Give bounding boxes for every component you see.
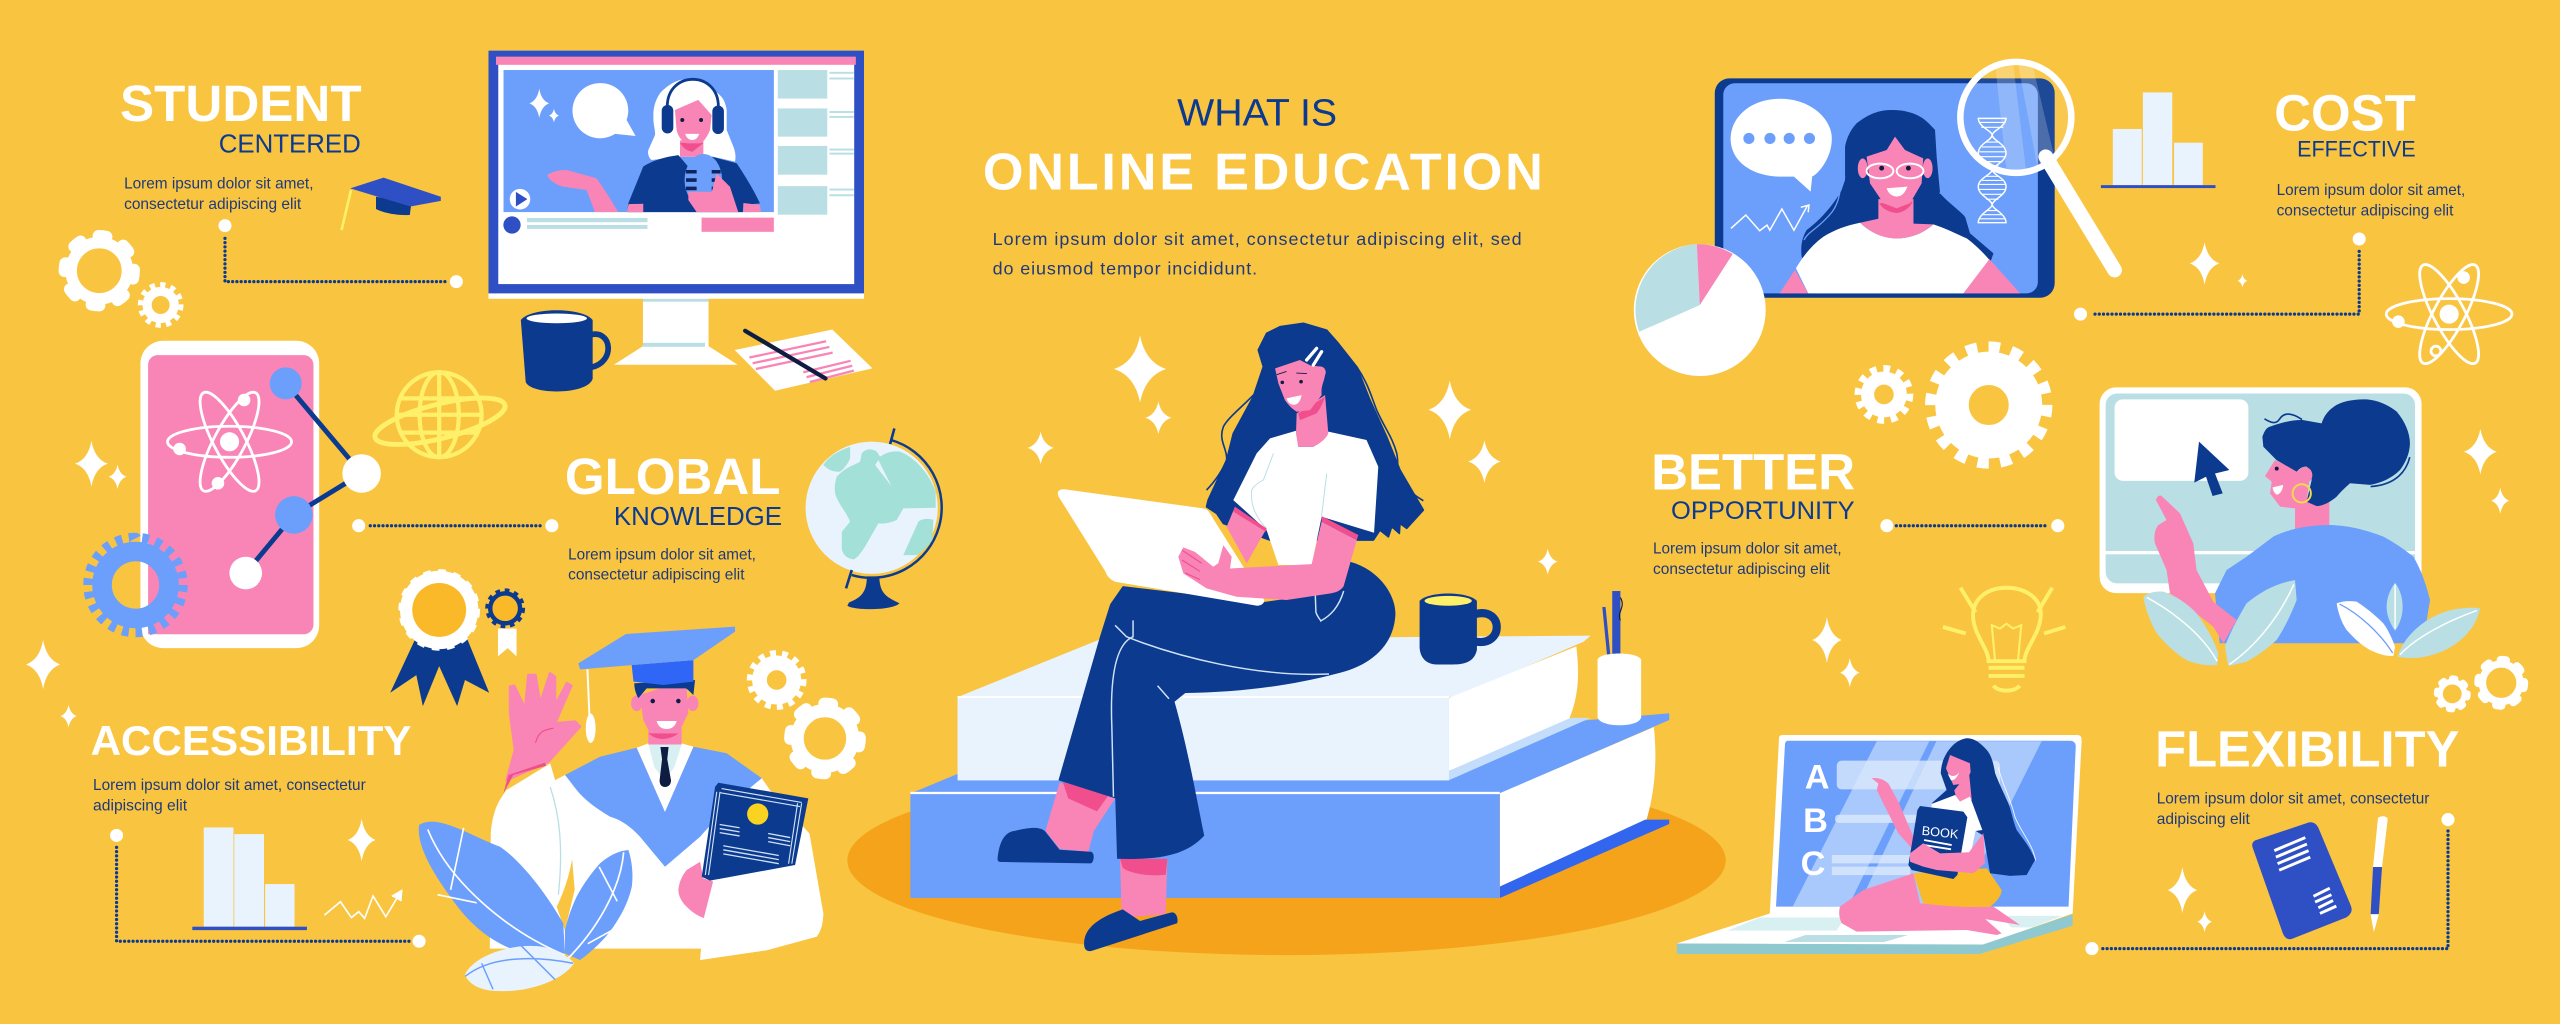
title block: do eiusmod tempor incididunt. <box>993 258 1257 278</box>
pie chart <box>1634 244 1766 376</box>
speech bubble dots <box>1731 99 1832 192</box>
icon: white gear bottom right large <box>2478 660 2524 706</box>
icon: paper and pen <box>735 329 872 391</box>
heading: student centered: CENTERED <box>219 131 361 159</box>
monitor stand <box>614 299 738 365</box>
icon: white atom <box>2386 258 2512 370</box>
pointing arm <box>2154 496 2237 643</box>
face <box>1275 360 1326 412</box>
heading: better opportunity: consectetur adipiscing elit <box>1653 561 1831 578</box>
long hair back <box>1207 323 1423 540</box>
icon: large award rosette <box>390 573 489 706</box>
icon: white gear large left <box>64 236 134 305</box>
blue leaf small <box>565 850 632 960</box>
diploma <box>702 783 808 881</box>
jeans <box>1058 561 1395 859</box>
video area <box>504 70 774 212</box>
sparkles: near notebook <box>2168 867 2212 932</box>
heading: student centered <box>120 75 362 213</box>
heading: better opportunity: OPPORTUNITY <box>1671 497 1855 525</box>
mortarboard <box>632 660 693 685</box>
figure: woman with laptop <box>998 323 1423 951</box>
heading: global knowledge <box>565 448 782 583</box>
heading: better opportunity <box>1651 442 1855 578</box>
book label: BOOK <box>1921 823 1960 842</box>
far arm <box>1227 507 1267 563</box>
sparkles: near cost connector <box>2190 242 2247 287</box>
icon: desk globe <box>806 428 942 609</box>
woman portrait <box>1780 110 2020 293</box>
heading: accessibility: Lorem ipsum dolor sit amet, consectetur <box>93 777 366 794</box>
magnifying glass <box>1960 62 2115 270</box>
heading: accessibility: adipiscing elit <box>93 798 188 815</box>
panel: tablet with woman <box>1715 62 2115 298</box>
raised hand <box>507 673 580 780</box>
icon: coffee mug navy <box>521 310 608 391</box>
heading: global knowledge: consectetur adipiscing elit <box>568 566 745 583</box>
sparkles: right of screen <box>2464 429 2509 514</box>
title block <box>983 92 1543 278</box>
heading: cost effective: Lorem ipsum dolor sit amet, <box>2277 182 2465 199</box>
panel: laptop with girl <box>1677 735 2082 954</box>
atom symbol <box>168 386 292 498</box>
icon: blue notebook <box>2252 822 2352 939</box>
gown collar <box>565 747 762 867</box>
icon: pencil <box>2371 816 2388 932</box>
head <box>648 727 682 744</box>
icon: graduation cap <box>342 178 441 230</box>
cursor arrow <box>2194 442 2229 496</box>
neck <box>1296 395 1328 447</box>
dna helix <box>1978 118 2006 223</box>
icon: pencil cup <box>1598 591 1641 725</box>
heading: flexibility: FLEXIBILITY <box>2155 721 2459 778</box>
necktie <box>660 747 671 787</box>
video caption row <box>503 216 774 234</box>
heading: student centered: STUDENT <box>120 75 362 132</box>
laptop lid <box>1058 489 1264 606</box>
panel: screen with woman clicking <box>2100 387 2480 666</box>
small trend line <box>1731 205 1809 231</box>
heading: cost effective <box>2274 84 2465 219</box>
lower book <box>910 713 1669 793</box>
globe continents <box>823 447 850 472</box>
title block: WHAT IS <box>1177 92 1337 135</box>
connector: flexibility <box>2085 813 2455 955</box>
lower far leg <box>1045 783 1115 852</box>
icon: small award rosette <box>487 590 523 656</box>
panel: stacked books <box>910 636 1669 898</box>
heading: cost effective: consectetur adipiscing elit <box>2277 202 2454 219</box>
heading: flexibility: adipiscing elit <box>2157 811 2251 828</box>
icon: white gear bottom right small <box>2437 678 2468 709</box>
trend line arrow <box>324 891 402 918</box>
woman with bun <box>2215 399 2430 643</box>
pink forearm <box>678 862 713 918</box>
icon: white gear pair centre right large <box>1932 349 2045 461</box>
answer letters: C <box>1801 845 1825 883</box>
heading: better opportunity: BETTER <box>1651 442 1855 500</box>
icon: light bulb <box>1943 588 2065 691</box>
pale leaf <box>465 946 574 991</box>
answer letters: A <box>1805 759 1830 797</box>
heading: cost effective: COST <box>2274 84 2416 142</box>
leaves cluster <box>2143 580 2480 666</box>
sparkles: around woman <box>1028 336 1558 575</box>
bar chart: accessibility <box>192 827 307 930</box>
gown body <box>490 763 823 960</box>
heading: accessibility <box>91 717 412 815</box>
connector: accessibility <box>110 829 426 948</box>
sparkles: near bulb <box>1812 617 1860 687</box>
laptop screen <box>1770 735 2082 913</box>
far slipper <box>998 828 1094 863</box>
upper book <box>958 636 1591 697</box>
heading: cost effective: EFFECTIVE <box>2297 137 2416 162</box>
connector: global knowledge <box>352 519 558 532</box>
molecule nodes <box>229 367 381 589</box>
panel: pink phone with atom <box>140 341 381 648</box>
icon: blue gear <box>89 538 182 632</box>
heading: better opportunity: Lorem ipsum dolor sit amet, <box>1653 540 1842 557</box>
answer letters: B <box>1803 802 1828 840</box>
connector: cost effective <box>2074 232 2366 321</box>
icon: white gear near graduate top <box>751 654 803 706</box>
answer rows <box>1832 761 2000 875</box>
base ellipse under books <box>847 766 1726 955</box>
video sidebar thumbnails <box>778 70 854 215</box>
sparkles: left of phone <box>75 441 127 489</box>
near slipper <box>1084 909 1178 951</box>
girl with book <box>1839 738 2036 935</box>
icon: white gear pair centre right small <box>1859 369 1909 420</box>
gown slit <box>557 859 575 931</box>
sleeve over diploma <box>700 850 823 960</box>
connector: student centered <box>218 219 463 288</box>
sparkles: above accessibility <box>26 640 77 728</box>
heading: global knowledge: KNOWLEDGE <box>614 503 782 531</box>
bar chart: cost effective <box>2101 92 2216 188</box>
panel: desktop monitor with presenter <box>488 51 864 365</box>
panel: graduate student <box>419 627 823 991</box>
icon: yellow globe with ring <box>371 372 509 457</box>
t-shirt <box>1233 431 1378 565</box>
sparkle near bar chart <box>348 819 376 861</box>
icon: navy mug on books <box>1420 593 1497 664</box>
heading: student centered: Lorem ipsum dolor sit amet, <box>124 176 313 193</box>
heading: global knowledge: GLOBAL <box>565 448 780 505</box>
answer letters <box>1801 759 1830 883</box>
near lower leg <box>1120 859 1167 918</box>
connector: better opportunity <box>1880 519 2064 532</box>
heading: global knowledge: Lorem ipsum dolor sit amet, <box>568 546 756 563</box>
heading: flexibility: Lorem ipsum dolor sit amet, consectetur <box>2157 790 2429 807</box>
heading: accessibility: ACCESSIBILITY <box>91 717 412 764</box>
title block: ONLINE EDUCATION <box>983 143 1543 201</box>
dialog box <box>2115 399 2248 481</box>
laptop base <box>1677 913 2073 945</box>
blue leaf large <box>419 822 565 956</box>
title block: Lorem ipsum dolor sit amet, consectetur adipiscing elit, sed <box>993 229 1522 249</box>
heading: flexibility <box>2155 721 2459 828</box>
heading: student centered: consectetur adipiscing elit <box>124 196 302 213</box>
icon: white gear small left <box>141 285 180 325</box>
near arm <box>1178 522 1357 600</box>
icon: white gear near graduate bottom <box>790 704 860 773</box>
